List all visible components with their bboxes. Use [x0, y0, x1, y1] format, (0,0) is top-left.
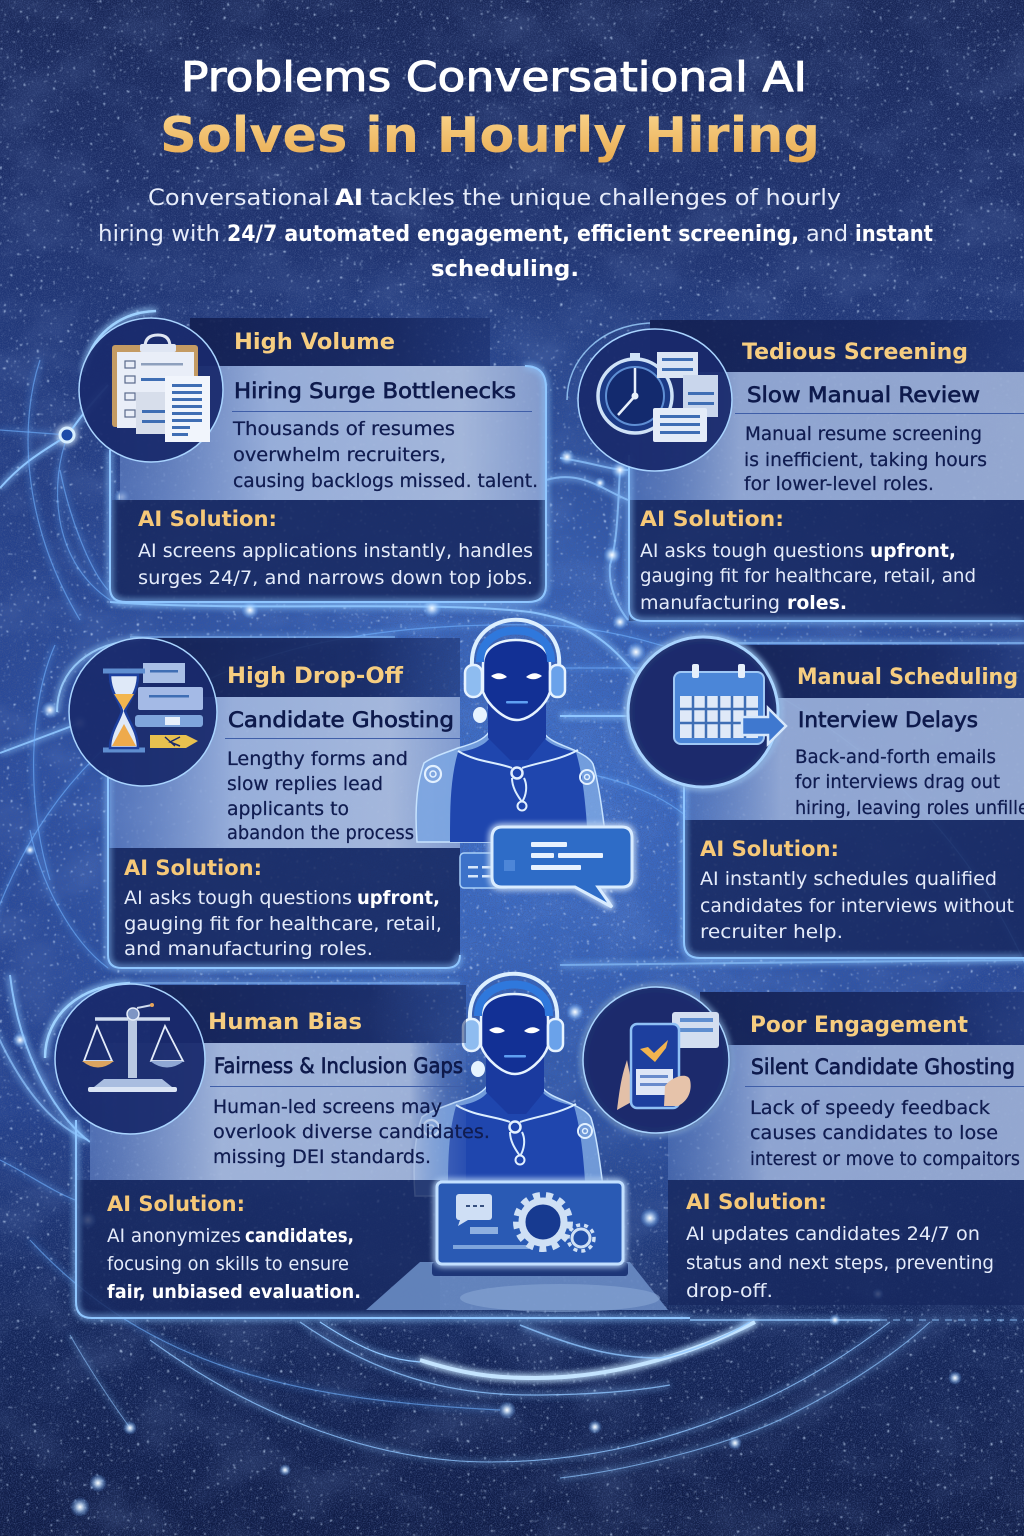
solution text: gauging fit for healthcare, retail, [124, 913, 442, 935]
solution text: recruiter help. [700, 921, 843, 943]
solution text: AI screens applications instantly, handles [138, 540, 533, 562]
problem text [744, 423, 987, 495]
solution text: candidates for interviews without [700, 895, 1014, 917]
subtitle: 24/7 automated engagement, efficient screening, [227, 222, 799, 247]
solution panel [110, 500, 546, 602]
subheading: Silent Candidate Ghosting [751, 1055, 1015, 1079]
problem text: for interviews drag out [795, 771, 1000, 793]
header band [650, 320, 1024, 372]
panel: Human Bias [45, 983, 690, 1318]
problem text: is inefficient, taking hours [744, 449, 987, 471]
subtitle: Conversational [148, 186, 329, 211]
solution text: AI Solution: [124, 856, 262, 880]
network lines [0, 360, 1024, 1478]
solution text: AI instantly schedules qualified [700, 868, 997, 890]
solution text: AI asks tough questions [124, 887, 352, 909]
subtitle: and [806, 222, 848, 247]
panel: High Volume [79, 311, 547, 602]
heading: Human Bias [208, 1010, 362, 1035]
icon: clipboard and resumes [79, 311, 223, 462]
problem text [227, 748, 414, 844]
solution text: drop-off. [686, 1280, 773, 1302]
problem text: abandon the process [227, 822, 414, 844]
subtitle: AI [335, 186, 363, 211]
heading: High Volume [234, 330, 395, 355]
problem text: Back-and-forth emails [795, 746, 996, 768]
problem text [795, 746, 1024, 819]
solution text: manufacturing [640, 592, 780, 614]
problem text [213, 1096, 490, 1168]
solution text: fair, unbiased evaluation. [107, 1281, 361, 1303]
header band [150, 638, 460, 697]
panel: Poor Engagement [583, 987, 1024, 1305]
problem text: Lack of speedy feedback [750, 1097, 990, 1119]
solution text: and manufacturing roles. [124, 938, 373, 960]
problem panel [686, 698, 1024, 820]
title [160, 53, 820, 164]
problem text: Lengthy forms and [227, 748, 408, 770]
header band [700, 992, 1024, 1045]
solution text: AI Solution: [700, 837, 839, 861]
solution panel [76, 1180, 440, 1318]
solution text: roles. [787, 592, 847, 614]
solution text: gauging fit for healthcare, retail, and [640, 565, 976, 587]
subtitle [98, 186, 933, 282]
icon: phone in hand [583, 987, 729, 1133]
solution text: surges 24/7, and narrows down top jobs. [138, 567, 533, 589]
problem panel [668, 1045, 1024, 1180]
icon: calendar [628, 637, 786, 787]
problem text: causing backlogs missed. talent. [233, 470, 538, 492]
subheading: Slow Manual Review [747, 383, 980, 407]
solution text: AI anonymizes [107, 1225, 241, 1247]
icon: chat bubble [460, 827, 632, 907]
icon: stopwatch and documents [567, 323, 732, 471]
heading: High Drop-Off [227, 664, 404, 689]
icon: scales [45, 983, 205, 1134]
solution panel [108, 848, 460, 968]
subtitle: scheduling. [431, 257, 579, 282]
solution text [107, 1192, 361, 1303]
solution text [640, 507, 976, 614]
solution text [138, 507, 533, 589]
icon: hourglass and forms [57, 638, 217, 786]
subtitle: tackles the unique challenges of hourly [370, 186, 841, 211]
problem text: Human-led screens may [213, 1096, 442, 1118]
icon: laptop with gears [366, 1182, 668, 1312]
solution text [700, 837, 1014, 943]
solution text [124, 856, 442, 960]
subheading: Hiring Surge Bottlenecks [234, 379, 516, 403]
panel: Manual Scheduling [628, 637, 1024, 958]
problem text: missing DEI standards. [213, 1146, 431, 1168]
problem text: overwhelm recruiters, [233, 444, 446, 466]
solution text: AI asks tough questions [640, 540, 864, 562]
solution text: upfront, [357, 887, 440, 909]
subtitle: hiring with [98, 222, 220, 247]
figure: AI assistant with headset [416, 620, 606, 842]
figure: second AI assistant [414, 974, 604, 1196]
solution text: AI updates candidates 24/7 on [686, 1223, 980, 1245]
panel: High Drop-Off [57, 638, 460, 968]
problem text: Manual resume screening [745, 423, 982, 445]
header band [730, 645, 1024, 698]
problem text: Thousands of resumes [232, 418, 455, 440]
solution text: status and next steps, preventing [686, 1252, 994, 1274]
decorative glow stars [12, 449, 962, 1517]
subheading: Interview Delays [798, 708, 978, 732]
solution text: AI Solution: [138, 507, 277, 531]
solution panel [629, 500, 1024, 621]
problem text [750, 1097, 1020, 1170]
problem panel [110, 697, 460, 848]
subtitle: instant [855, 222, 933, 247]
heading: Tedious Screening [742, 340, 968, 365]
header band [150, 985, 466, 1043]
problem text: causes candidates to lose [750, 1122, 998, 1144]
subheading: Candidate Ghosting [228, 708, 454, 732]
title: Solves in Hourly Hiring [160, 107, 820, 164]
problem panel [120, 366, 547, 500]
solution panel [684, 820, 1024, 958]
problem text: for lower-level roles. [744, 473, 934, 495]
title: Problems Conversational AI [181, 53, 807, 101]
problem panel [630, 372, 1024, 500]
problem text: slow replies lead [227, 773, 383, 795]
solution text: AI Solution: [640, 507, 784, 531]
problem panel [90, 1043, 466, 1180]
problem text [232, 418, 538, 492]
problem text: overlook diverse candidates. [213, 1121, 490, 1143]
panel: Tedious Screening [567, 320, 1024, 621]
heading: Poor Engagement [750, 1013, 968, 1038]
header band [190, 318, 490, 366]
subheading: Fairness & Inclusion Gaps [214, 1054, 463, 1078]
solution text: focusing on skills to ensure [107, 1253, 349, 1275]
solution text: upfront, [870, 540, 956, 562]
problem text: applicants to [227, 798, 349, 820]
solution text [686, 1190, 994, 1302]
solution text: AI Solution: [686, 1190, 827, 1214]
solution panel [668, 1180, 1024, 1305]
solution text: AI Solution: [107, 1192, 245, 1216]
solution text: candidates, [245, 1225, 354, 1247]
